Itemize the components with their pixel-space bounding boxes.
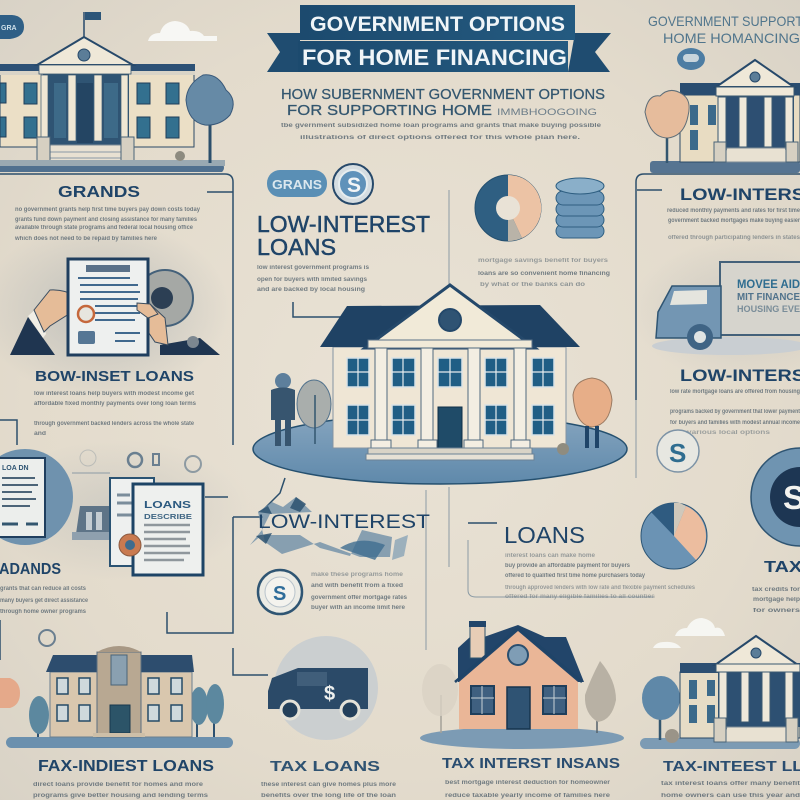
icon: grants pill (267, 170, 327, 197)
heading: low-interest with brush decoration (250, 497, 430, 560)
icon: large tax coin (751, 448, 800, 546)
panel: grands (0, 174, 233, 437)
tower (97, 652, 141, 737)
body text (670, 389, 800, 436)
illustration: loan documents: LOANS (144, 500, 191, 511)
illustration: documents left (0, 449, 73, 545)
ground ellipse (253, 414, 627, 484)
panel: grants badge and low-interest loans: LOANS (257, 234, 336, 260)
steps (44, 145, 128, 165)
body text (34, 391, 197, 437)
portico (718, 95, 794, 153)
ribbon tails (267, 33, 300, 72)
icon: top-left badge (0, 15, 24, 39)
body text: benefits over the long life of the loan (261, 793, 396, 799)
body text: direct loans provide benefit for homes and more (33, 782, 204, 788)
heading: government support top right: HOME HOMANCING (663, 30, 800, 46)
text: tax right (752, 559, 800, 614)
panel outline (0, 174, 233, 195)
icon: moving truck: MIT FINANCE (737, 292, 800, 303)
body text: low-interest lower: government offer mortgage rates (311, 595, 408, 601)
subtitle: IMMBHOOGOING (497, 107, 597, 117)
illustration: peach house (420, 621, 624, 749)
subtitle: FOR SUPPORTING HOME (287, 102, 492, 119)
panel: low-interest top right (636, 174, 800, 472)
trees (29, 684, 224, 737)
text: tax right: tax credits for (752, 587, 800, 593)
building: bottom-left civic (0, 630, 233, 748)
door (438, 407, 462, 449)
steps (722, 148, 792, 162)
text: tax right: for owners (753, 608, 800, 614)
connector lines (0, 190, 790, 675)
steps (722, 727, 797, 742)
icon: dollar coin: S (273, 583, 286, 605)
icon: dollar coin (258, 570, 302, 614)
round window (508, 645, 528, 665)
subtitle (281, 86, 605, 141)
heading: GRANDS (58, 184, 140, 201)
banner bands (300, 5, 575, 40)
icon: grants pill: GRANS (272, 177, 322, 192)
body text (261, 782, 397, 799)
subheading: TAX INTERST INSANS (442, 755, 620, 772)
body text: low interest government programs is (257, 265, 370, 271)
paper (0, 458, 45, 537)
body text: open for buyers with limited savings (257, 277, 368, 283)
columns (371, 348, 530, 448)
subheading: FAX-INDIEST LOANS (38, 758, 214, 775)
soft background washes (0, 220, 800, 580)
body text (14, 207, 201, 242)
title line one: GOVERNMENT OPTIONS (310, 13, 565, 36)
text block: chart caption: loans are so convenient home financing (478, 271, 610, 277)
wings (0, 73, 194, 147)
body text: available through state programs and federal local housing office (15, 225, 194, 231)
body text: tax interest loans offer many benefit (661, 781, 800, 787)
portico (718, 672, 800, 727)
subheading: LOW-INTERS (680, 366, 800, 385)
roof (46, 655, 194, 672)
subtitle: tbe gvernment subsidized home loan programs and grants that make buying possible (281, 123, 602, 129)
subtitle: illustrations of direct options offered for this whole plan here. (300, 135, 581, 141)
tree (659, 705, 661, 740)
body text (257, 265, 370, 293)
icon: cloud (148, 21, 217, 41)
body text: low interest loans help buyers with modest income get (34, 391, 194, 397)
body (50, 672, 192, 737)
windows (57, 678, 182, 721)
blue circle (0, 449, 73, 545)
windows (0, 83, 179, 138)
grey tree (596, 700, 598, 733)
body text: through government backed lenders across the whole state (34, 421, 195, 427)
body text: home owners can use this year and (661, 793, 800, 799)
side badge (0, 678, 20, 708)
ground strip (6, 737, 233, 748)
house body (333, 347, 566, 448)
body text: programs give better housing and lending terms (33, 793, 209, 799)
peach tree (573, 378, 612, 448)
body text: no government grants help first time buyers pay down costs today (15, 207, 201, 213)
flag (83, 12, 85, 40)
icon: truck in circle: $ (324, 683, 335, 705)
icon: dollar coin (657, 430, 699, 472)
roof wings (320, 305, 580, 347)
text: tax right: TAX (764, 559, 800, 576)
heading: adands: ADANDS (0, 561, 61, 578)
body text: grants fund down payment and closing assistance for many families (15, 217, 198, 223)
illustration: loan documents: DESCRIBE (144, 514, 192, 521)
icon: clouds bottom right (653, 618, 725, 648)
peach tree (645, 90, 689, 163)
body text: and (34, 431, 46, 437)
icon: small grey folder (72, 506, 114, 540)
body (459, 631, 578, 729)
text block: chart caption (478, 258, 610, 288)
wing (680, 95, 800, 162)
icon: document held in hands (10, 259, 220, 355)
building: bottom-right government (640, 636, 800, 749)
pediment (715, 636, 798, 665)
body text: low-interest lower: make these programs home (311, 572, 404, 578)
pediment (365, 285, 535, 348)
panel: grants badge and low-interest loans (257, 164, 430, 293)
body text: adands: through home owner programs (0, 609, 87, 615)
body text (505, 553, 696, 600)
door (507, 687, 530, 729)
ground (420, 727, 624, 749)
body text (33, 782, 209, 799)
body text (661, 781, 800, 799)
title banner (267, 5, 611, 72)
body text (445, 780, 611, 799)
text block: chart caption: by what or the banks can do (480, 282, 585, 288)
grey tree (297, 380, 331, 444)
body text: which does not need to be repaid by families here (14, 236, 158, 242)
wing (680, 672, 800, 738)
icon: row of round symbols (80, 450, 201, 472)
body text: interest loans can make home (505, 553, 596, 559)
body text: reduce taxable yearly income of families here (445, 793, 611, 799)
body text (667, 208, 800, 241)
body text: low-interest lower: buyer with an income limit here (311, 605, 406, 611)
chart: pie right (641, 503, 707, 569)
body text: and are backed by local housing (257, 287, 365, 293)
icon: top-right badge (677, 48, 705, 70)
panel outline (636, 174, 800, 400)
faint tree (440, 695, 442, 733)
portico (43, 73, 129, 145)
chimney (470, 622, 485, 658)
heading: LOW-INTERS (680, 185, 800, 204)
icon: dollar coin: S (347, 174, 361, 197)
body text: offered for many eligible families to all counties (505, 594, 656, 600)
title line two: FOR HOME FINANCING (302, 45, 567, 70)
building: top-left government (0, 12, 233, 172)
icon: truck in circle (268, 636, 378, 740)
body text: best mortgage interest deduction for homeowner (445, 780, 611, 786)
person (271, 373, 295, 446)
panel: loans (504, 522, 696, 600)
pediment (37, 37, 133, 65)
pediment (716, 60, 794, 87)
roof (458, 625, 584, 682)
building: top-right government (645, 60, 800, 173)
body text: low-interest lower: and with benefit from a fixed (311, 583, 403, 589)
icon: coin stack (556, 178, 604, 238)
heading: government support top right (648, 13, 800, 46)
icon: moving truck (652, 262, 800, 355)
body text: through approved lenders with low rate and flexible payment schedules (505, 585, 696, 591)
windows (471, 686, 566, 714)
subheading: TAX-INTEEST LL (663, 758, 800, 775)
body text: affordable fixed monthly payments over long loan terms (34, 401, 197, 407)
heading: LOW-INTEREST (257, 211, 430, 237)
subheading: TAX LOANS (270, 758, 380, 775)
chart: donut pie top centre (475, 175, 541, 241)
subtitle: HOW SUBERNMENT GOVERNMENT OPTIONS (281, 86, 605, 103)
icon: moving truck: HOUSING EVE (737, 304, 800, 314)
body text: these interest can give homes plus more (261, 782, 397, 788)
body text: offered to qualified first time home purchasers today (505, 573, 646, 579)
ground (640, 738, 800, 749)
illustration: documents left: LOA DN (2, 465, 29, 472)
icon: top-left badge: GRA (1, 25, 17, 32)
body text: and various local options (670, 430, 771, 436)
heading: LOANS (504, 522, 585, 548)
illustration: loan documents (110, 478, 203, 575)
door (110, 705, 130, 733)
text: tax right: mortgage help (753, 597, 800, 603)
icon: dollar coin (333, 164, 373, 204)
illustration: main central house (253, 285, 627, 484)
body text: adands (0, 586, 89, 615)
tree (208, 112, 212, 163)
ground strip (650, 161, 800, 173)
icon: dollar coin: S (669, 438, 686, 468)
body text: offered through participating lenders in states (668, 235, 800, 241)
steps (368, 448, 532, 454)
round window (439, 309, 461, 331)
subheading: loans: BOW-INSET LOANS (35, 368, 194, 385)
text block: chart caption: mortgage savings benefit for buyers (478, 258, 609, 264)
body text: low-interest lower (311, 572, 408, 611)
body text: adands: many buyers get direct assistance (0, 598, 89, 604)
windows (347, 358, 554, 435)
body text: buy provide an affordable payment for buyers (505, 563, 631, 569)
ground strip (0, 163, 224, 172)
heading: low-interest with brush decoration: LOW-INTEREST (258, 512, 430, 533)
body text: adands: grants that can reduce all costs (0, 586, 87, 592)
